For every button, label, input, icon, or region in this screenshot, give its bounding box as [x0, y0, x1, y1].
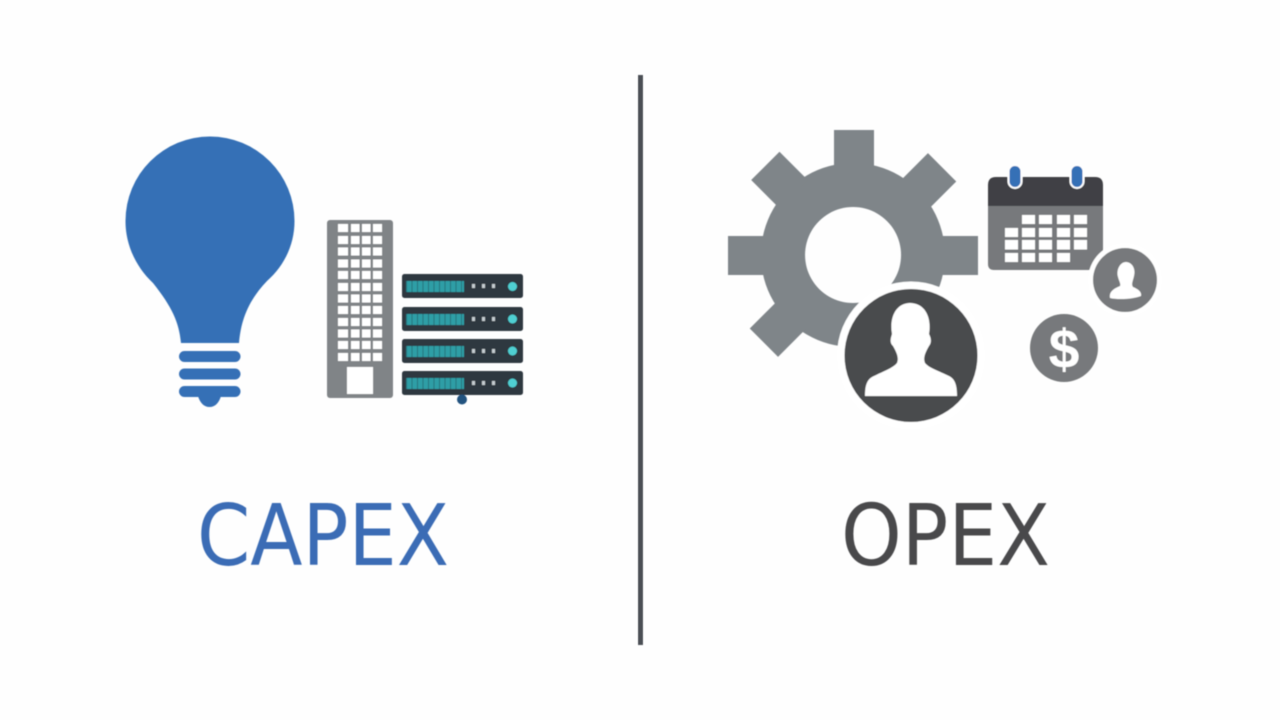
icon: light bulb: [126, 136, 294, 407]
divider line: [638, 75, 643, 645]
icon: office building: [327, 220, 393, 398]
icon: small person badge: [1088, 243, 1162, 317]
icon: server rack: [402, 274, 523, 404]
icon: large person badge: [837, 282, 985, 430]
icon: calendar: [988, 164, 1103, 270]
icon: dollar coin: [1030, 314, 1098, 382]
heading: OPEX: OPEX: [841, 487, 1050, 586]
heading: CAPEX: CAPEX: [197, 487, 449, 586]
icon: gear: [728, 130, 978, 357]
panel: OPEX: [728, 130, 1162, 586]
panel: CAPEX: [126, 136, 523, 586]
icon: dollar coin: $: [1049, 318, 1079, 380]
